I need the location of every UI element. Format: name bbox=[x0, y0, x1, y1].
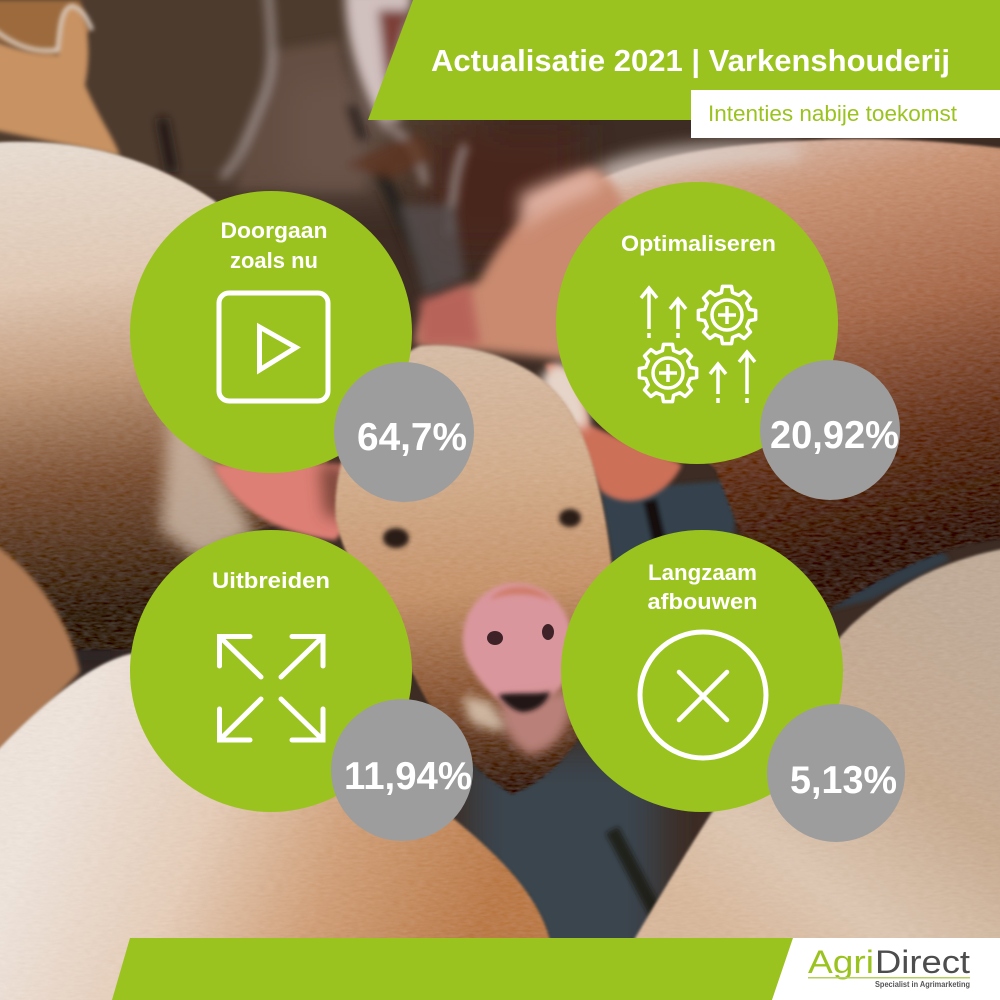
mouth bbox=[498, 692, 550, 712]
pig lower left bbox=[0, 530, 80, 790]
subtitle box: Intenties nabije toekomst bbox=[708, 101, 957, 126]
blurred pen background bbox=[0, 0, 660, 980]
icon: arrows and gears bbox=[639, 286, 756, 403]
logo: AgriDirect bbox=[772, 938, 1000, 1000]
panel: doorgaan zoals nu bbox=[130, 191, 474, 502]
logo: AgriDirect: Direct bbox=[875, 944, 970, 980]
icon: expand arrows bbox=[220, 636, 323, 740]
title banner bbox=[368, 0, 1000, 120]
pig bottom left bbox=[0, 652, 552, 1000]
icon: play bbox=[219, 293, 328, 401]
value badge bbox=[760, 360, 900, 500]
pig body right bbox=[480, 138, 1000, 610]
value badge bbox=[767, 704, 905, 842]
value badge: 11,94% bbox=[344, 755, 472, 798]
face bbox=[334, 344, 618, 795]
value badge bbox=[331, 699, 473, 841]
snout bbox=[463, 583, 572, 712]
logo: AgriDirect: Specialist in Agrimarketing bbox=[875, 979, 970, 989]
subtitle box bbox=[691, 90, 1000, 138]
chin bbox=[500, 690, 572, 755]
ear left bbox=[213, 463, 345, 540]
pig body left bbox=[0, 141, 340, 650]
panel: optimaliseren bbox=[556, 182, 900, 500]
heading: Optimaliseren bbox=[621, 231, 776, 256]
heading bbox=[648, 560, 758, 614]
out of focus legs and streaks bbox=[162, 0, 465, 300]
heading: Langzaam bbox=[648, 560, 757, 585]
icon: cross in circle bbox=[640, 632, 766, 758]
heading: Doorgaan bbox=[220, 218, 328, 243]
value badge: 64,7% bbox=[357, 416, 467, 459]
value badge bbox=[334, 362, 474, 502]
eyes bbox=[383, 528, 409, 548]
panel: langzaam afbouwen bbox=[561, 530, 905, 842]
nostrils bbox=[487, 631, 503, 645]
value badge: 20,92% bbox=[770, 414, 899, 457]
value badge: 5,13% bbox=[790, 759, 897, 802]
heading: zoals nu bbox=[230, 248, 318, 273]
heading: afbouwen bbox=[648, 589, 758, 614]
ear right bbox=[545, 364, 682, 501]
heading: Uitbreiden bbox=[212, 568, 330, 593]
pig head bbox=[213, 344, 682, 795]
heading bbox=[220, 218, 328, 273]
logo: AgriDirect: Agri bbox=[808, 944, 874, 980]
footer bar bbox=[112, 938, 793, 1000]
pig top left bbox=[0, 0, 90, 60]
pig bottom right bbox=[630, 542, 1000, 1000]
slate floor boards bbox=[600, 480, 950, 930]
panel: uitbreiden bbox=[130, 530, 473, 841]
title: Actualisatie 2021 | Varkenshouderij bbox=[431, 43, 950, 78]
